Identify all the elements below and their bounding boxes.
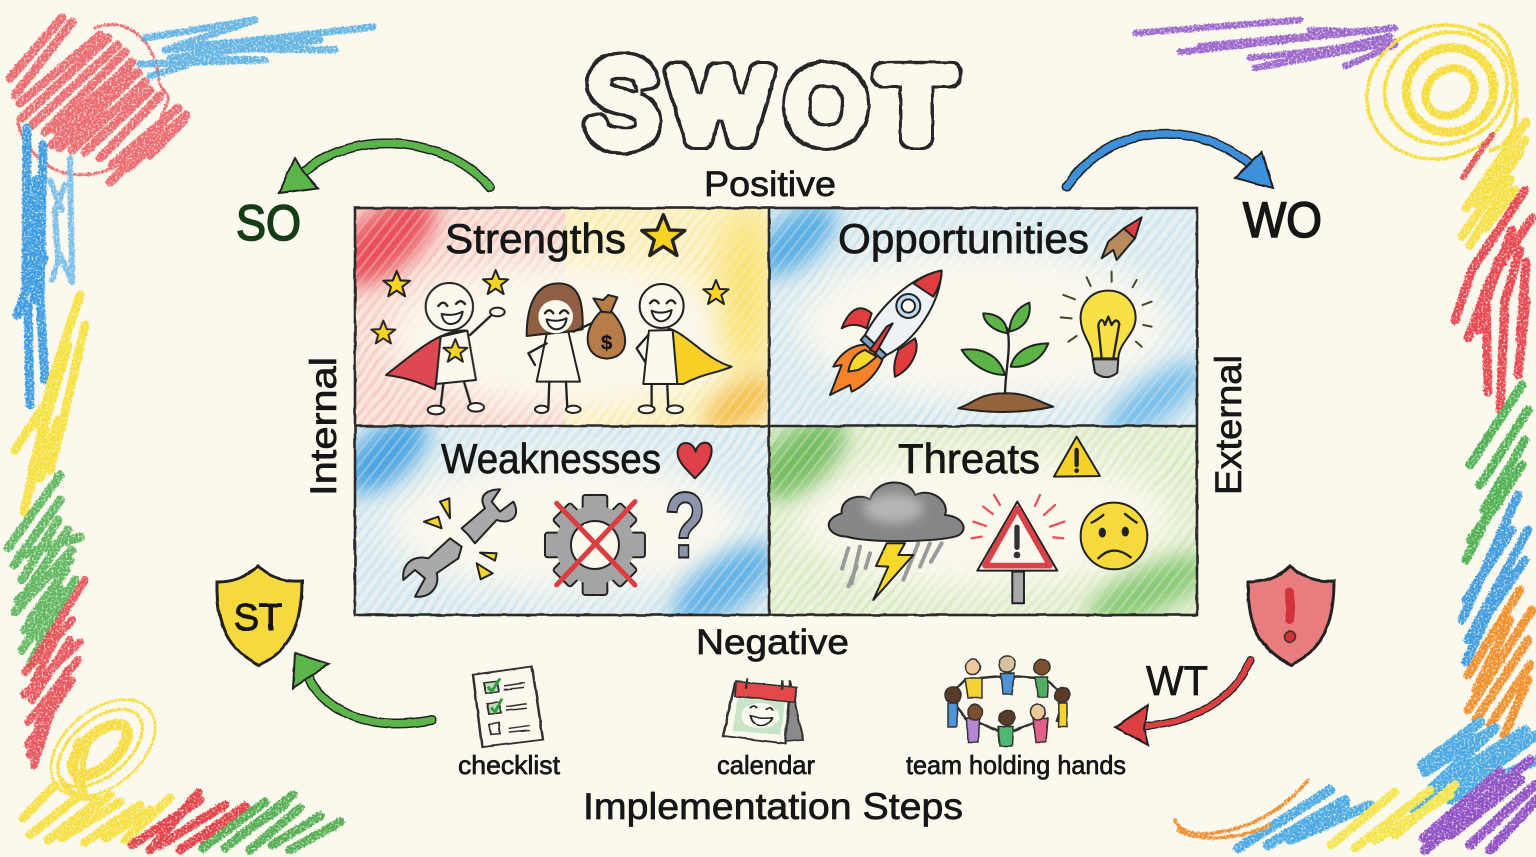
icon: storm cloud: [829, 482, 964, 600]
arrow: SO green curved: [279, 143, 490, 193]
icon: money bag: $: [601, 331, 613, 354]
yellow red green streaks bottom: [23, 785, 340, 850]
icon: person with yellow cape: [637, 284, 732, 413]
icon: heart: [678, 443, 712, 478]
opportunities illustrations: [830, 217, 1152, 412]
icon: sprouting plant: [958, 303, 1053, 412]
strengths illustrations: [371, 215, 732, 414]
icon: warning triangle heading: [1054, 437, 1100, 477]
weaknesses illustrations: [403, 443, 712, 597]
icon: warning sign: [972, 495, 1064, 603]
heading: Opportunities: Opportunities: [838, 215, 1089, 262]
title: W: [672, 50, 769, 162]
label: team holding hands: team holding hands: [906, 750, 1126, 780]
green streaks left: [8, 475, 80, 665]
label: WT: WT: [1146, 657, 1208, 704]
blue streaks left: [17, 128, 72, 405]
panel: opportunities fill: [770, 208, 1196, 426]
icon: checklist: [473, 666, 543, 747]
badge: ST shield: [217, 566, 302, 665]
heading: Implementation Steps: Implementation Steps: [583, 786, 963, 827]
icon: girl with money bag: [527, 283, 625, 413]
yellow scribble bottom-left: [33, 680, 173, 816]
label: checklist: checklist: [458, 750, 561, 780]
bottom-right corner streaks: [1175, 722, 1536, 850]
panel: weaknesses fill: [356, 426, 768, 614]
heading: Weaknesses: Weaknesses: [441, 435, 661, 482]
badge: WT warning shield: [1248, 566, 1334, 665]
icon: broken wrench: [403, 489, 516, 597]
yellow streaks left: [15, 295, 85, 512]
icon: superhero with red cape: [386, 283, 505, 414]
red streaks left: [24, 580, 85, 765]
heading: Strengths: Strengths: [445, 215, 626, 262]
icon: rocket: [830, 271, 942, 395]
threats illustrations: [829, 437, 1147, 603]
icon: sad face: [1081, 503, 1147, 569]
icon: crossed-out gear: [545, 495, 645, 595]
icon: stars: [371, 215, 729, 343]
blue streaks top-left: [140, 20, 373, 76]
label: SO: SO: [236, 195, 301, 251]
title: [586, 38, 953, 170]
icon: mini rocket: [1102, 217, 1142, 260]
icon: question mark: ?: [664, 474, 706, 578]
purple streaks top-right: [1135, 20, 1395, 68]
red scribble top-left: [10, 18, 186, 182]
icon: team holding hands: [945, 656, 1070, 746]
title: O: [787, 50, 865, 162]
axis label: Positive: Positive: [704, 165, 836, 204]
panel: threats fill: [770, 426, 1196, 614]
icon: light bulb: [1061, 272, 1152, 377]
axis label: Internal: Internal: [303, 357, 344, 496]
arrow: WT red curved: [1115, 660, 1250, 745]
red yellow green blue orange right border: [1455, 122, 1532, 735]
label: calendar: calendar: [717, 750, 815, 780]
badge: ST shield: ST: [234, 597, 282, 639]
arrow: WO blue curved: [1067, 134, 1273, 188]
title: S: [586, 38, 658, 170]
matrix grid lines: [355, 208, 1197, 615]
heading: Threats: Threats: [898, 435, 1040, 482]
title: T: [880, 50, 953, 162]
icon: calendar: [723, 678, 803, 743]
arrow: ST green curved: [293, 653, 432, 723]
panel: strengths fill: [356, 208, 768, 426]
axis label: Negative: Negative: [696, 623, 849, 662]
label: WO: WO: [1243, 192, 1322, 248]
yellow scribble top-right: [1348, 5, 1532, 179]
axis label: External: External: [1208, 355, 1249, 495]
